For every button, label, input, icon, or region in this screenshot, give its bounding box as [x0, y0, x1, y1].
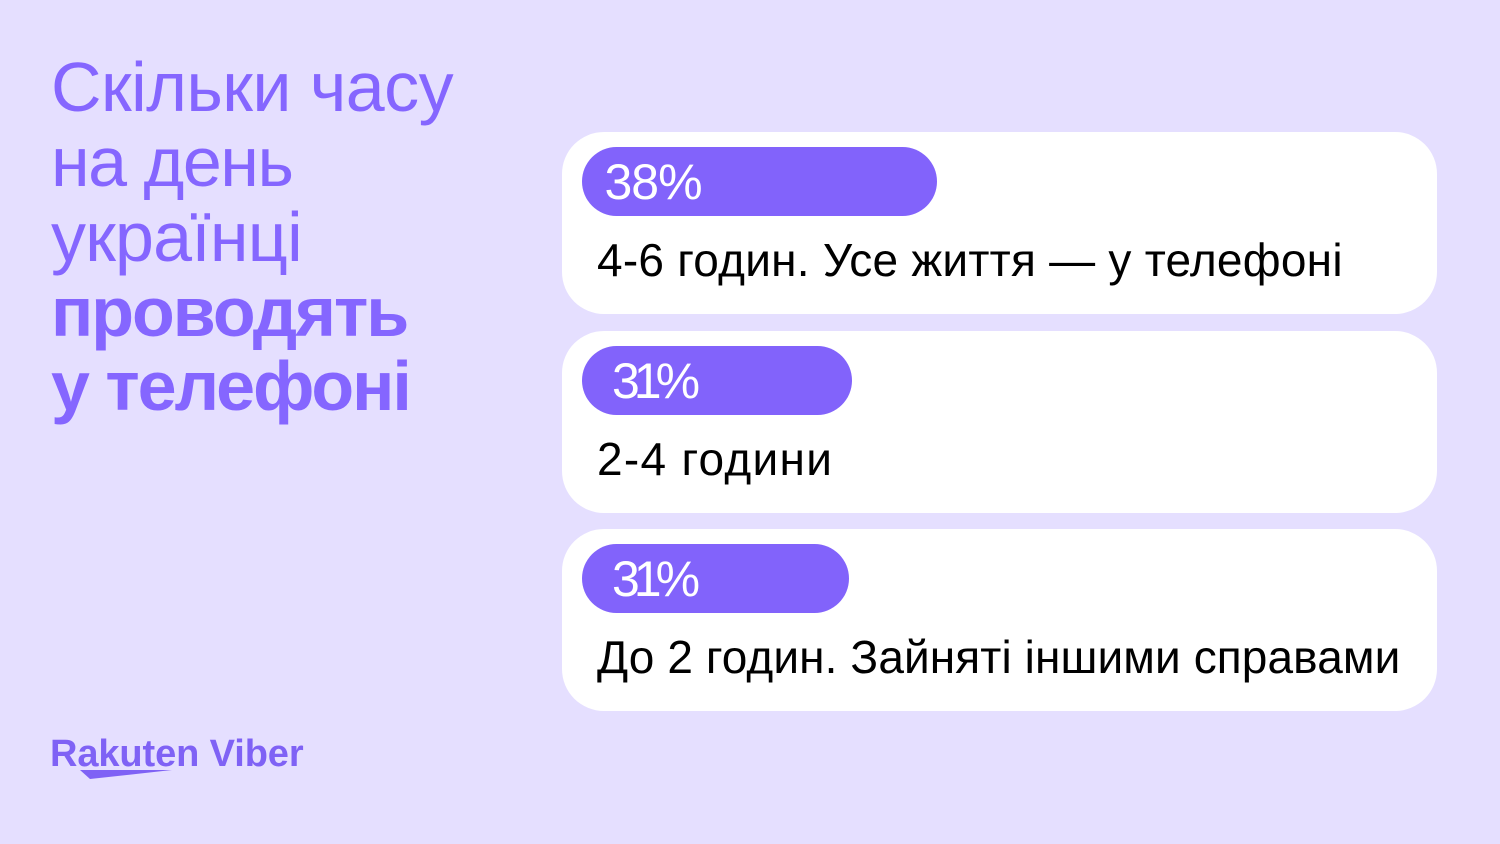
bar: 31%: 31% — [612, 353, 694, 409]
label: 4-6 hours: 4-6 годин. Усе життя — у телефоні — [597, 234, 1343, 286]
bar: 38%: 38% — [604, 154, 702, 210]
label: 2-4 hours: 2-4 години — [597, 433, 833, 485]
title: у телефоні — [51, 347, 410, 425]
label: up to 2 hours: До 2 годин. Зайняті іншими справами — [597, 631, 1400, 683]
bar: 31%: 31% — [612, 551, 694, 607]
bar: 31% — [582, 346, 852, 415]
title — [51, 48, 454, 425]
bar: 31% — [582, 544, 849, 613]
logo: Rakuten Viber: Rakuten Viber — [50, 733, 304, 775]
panel: 31% up to 2 hours — [562, 529, 1437, 711]
panel: 31% 2-4 hours — [562, 331, 1437, 513]
title: на день — [51, 123, 292, 201]
title: Скільки часу — [51, 48, 453, 126]
title: проводять — [51, 273, 407, 351]
title: українці — [51, 198, 302, 276]
panel: 38% — [562, 132, 1437, 314]
bar: 38% — [582, 147, 937, 216]
